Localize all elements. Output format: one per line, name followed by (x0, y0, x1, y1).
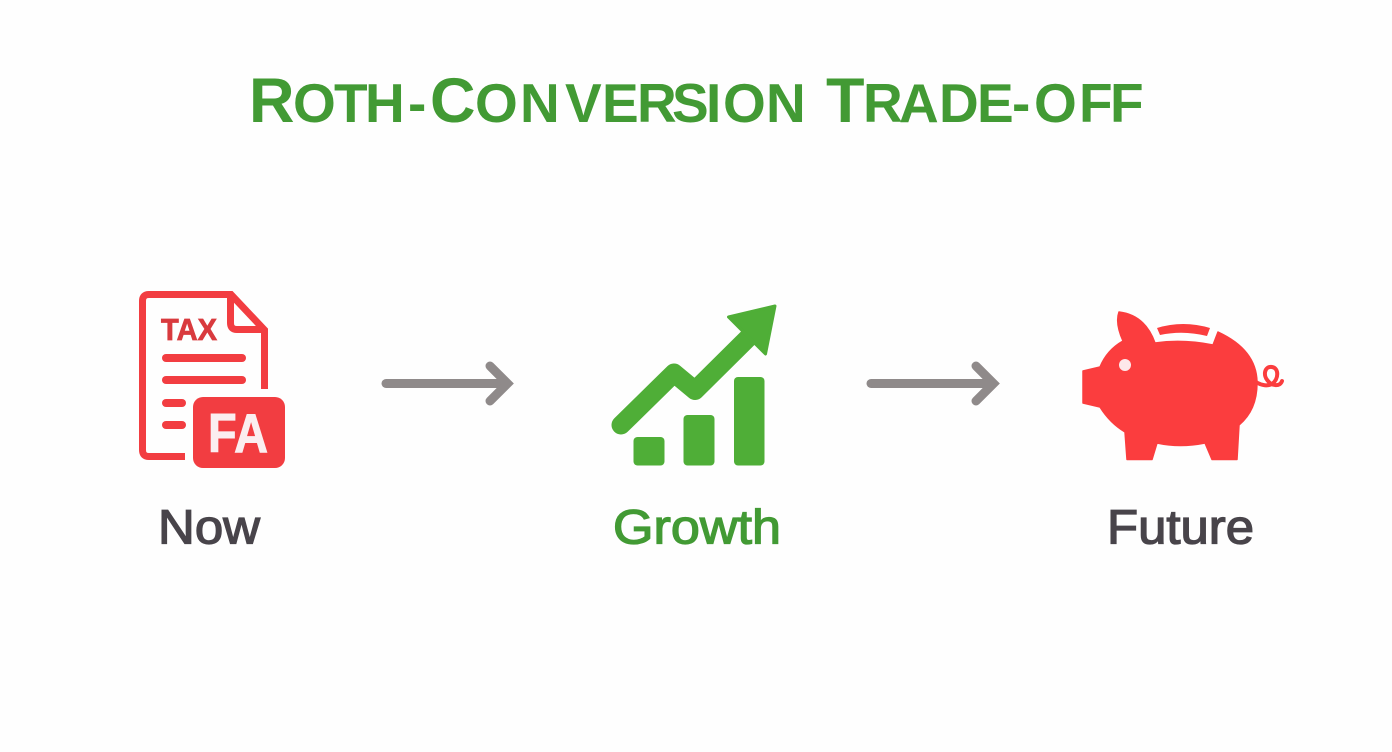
trend arrow line (621, 336, 750, 425)
arrow: now to growth (386, 366, 508, 401)
label: growth: Growth (613, 502, 781, 554)
trend arrow head (728, 306, 775, 354)
pig body (1083, 312, 1257, 460)
label: future: Future (1107, 502, 1254, 554)
document text lines (162, 354, 246, 429)
tax label: TAX (161, 312, 217, 347)
document outline (142, 294, 264, 456)
bars (634, 377, 764, 466)
FA badge text: FA (208, 402, 268, 464)
icon: growth chart (621, 306, 775, 466)
title: ROTH-CONVERSION TRADE-OFF (249, 66, 1144, 136)
arrow: growth to future (871, 366, 994, 401)
curly tail (1256, 367, 1282, 385)
label: now: Now (158, 502, 260, 554)
folded corner (230, 294, 264, 330)
icon: piggy bank (1083, 312, 1282, 460)
coin slot (1157, 324, 1210, 336)
icon: tax document (142, 294, 285, 468)
eye (1119, 359, 1131, 371)
FA badge (193, 397, 285, 468)
